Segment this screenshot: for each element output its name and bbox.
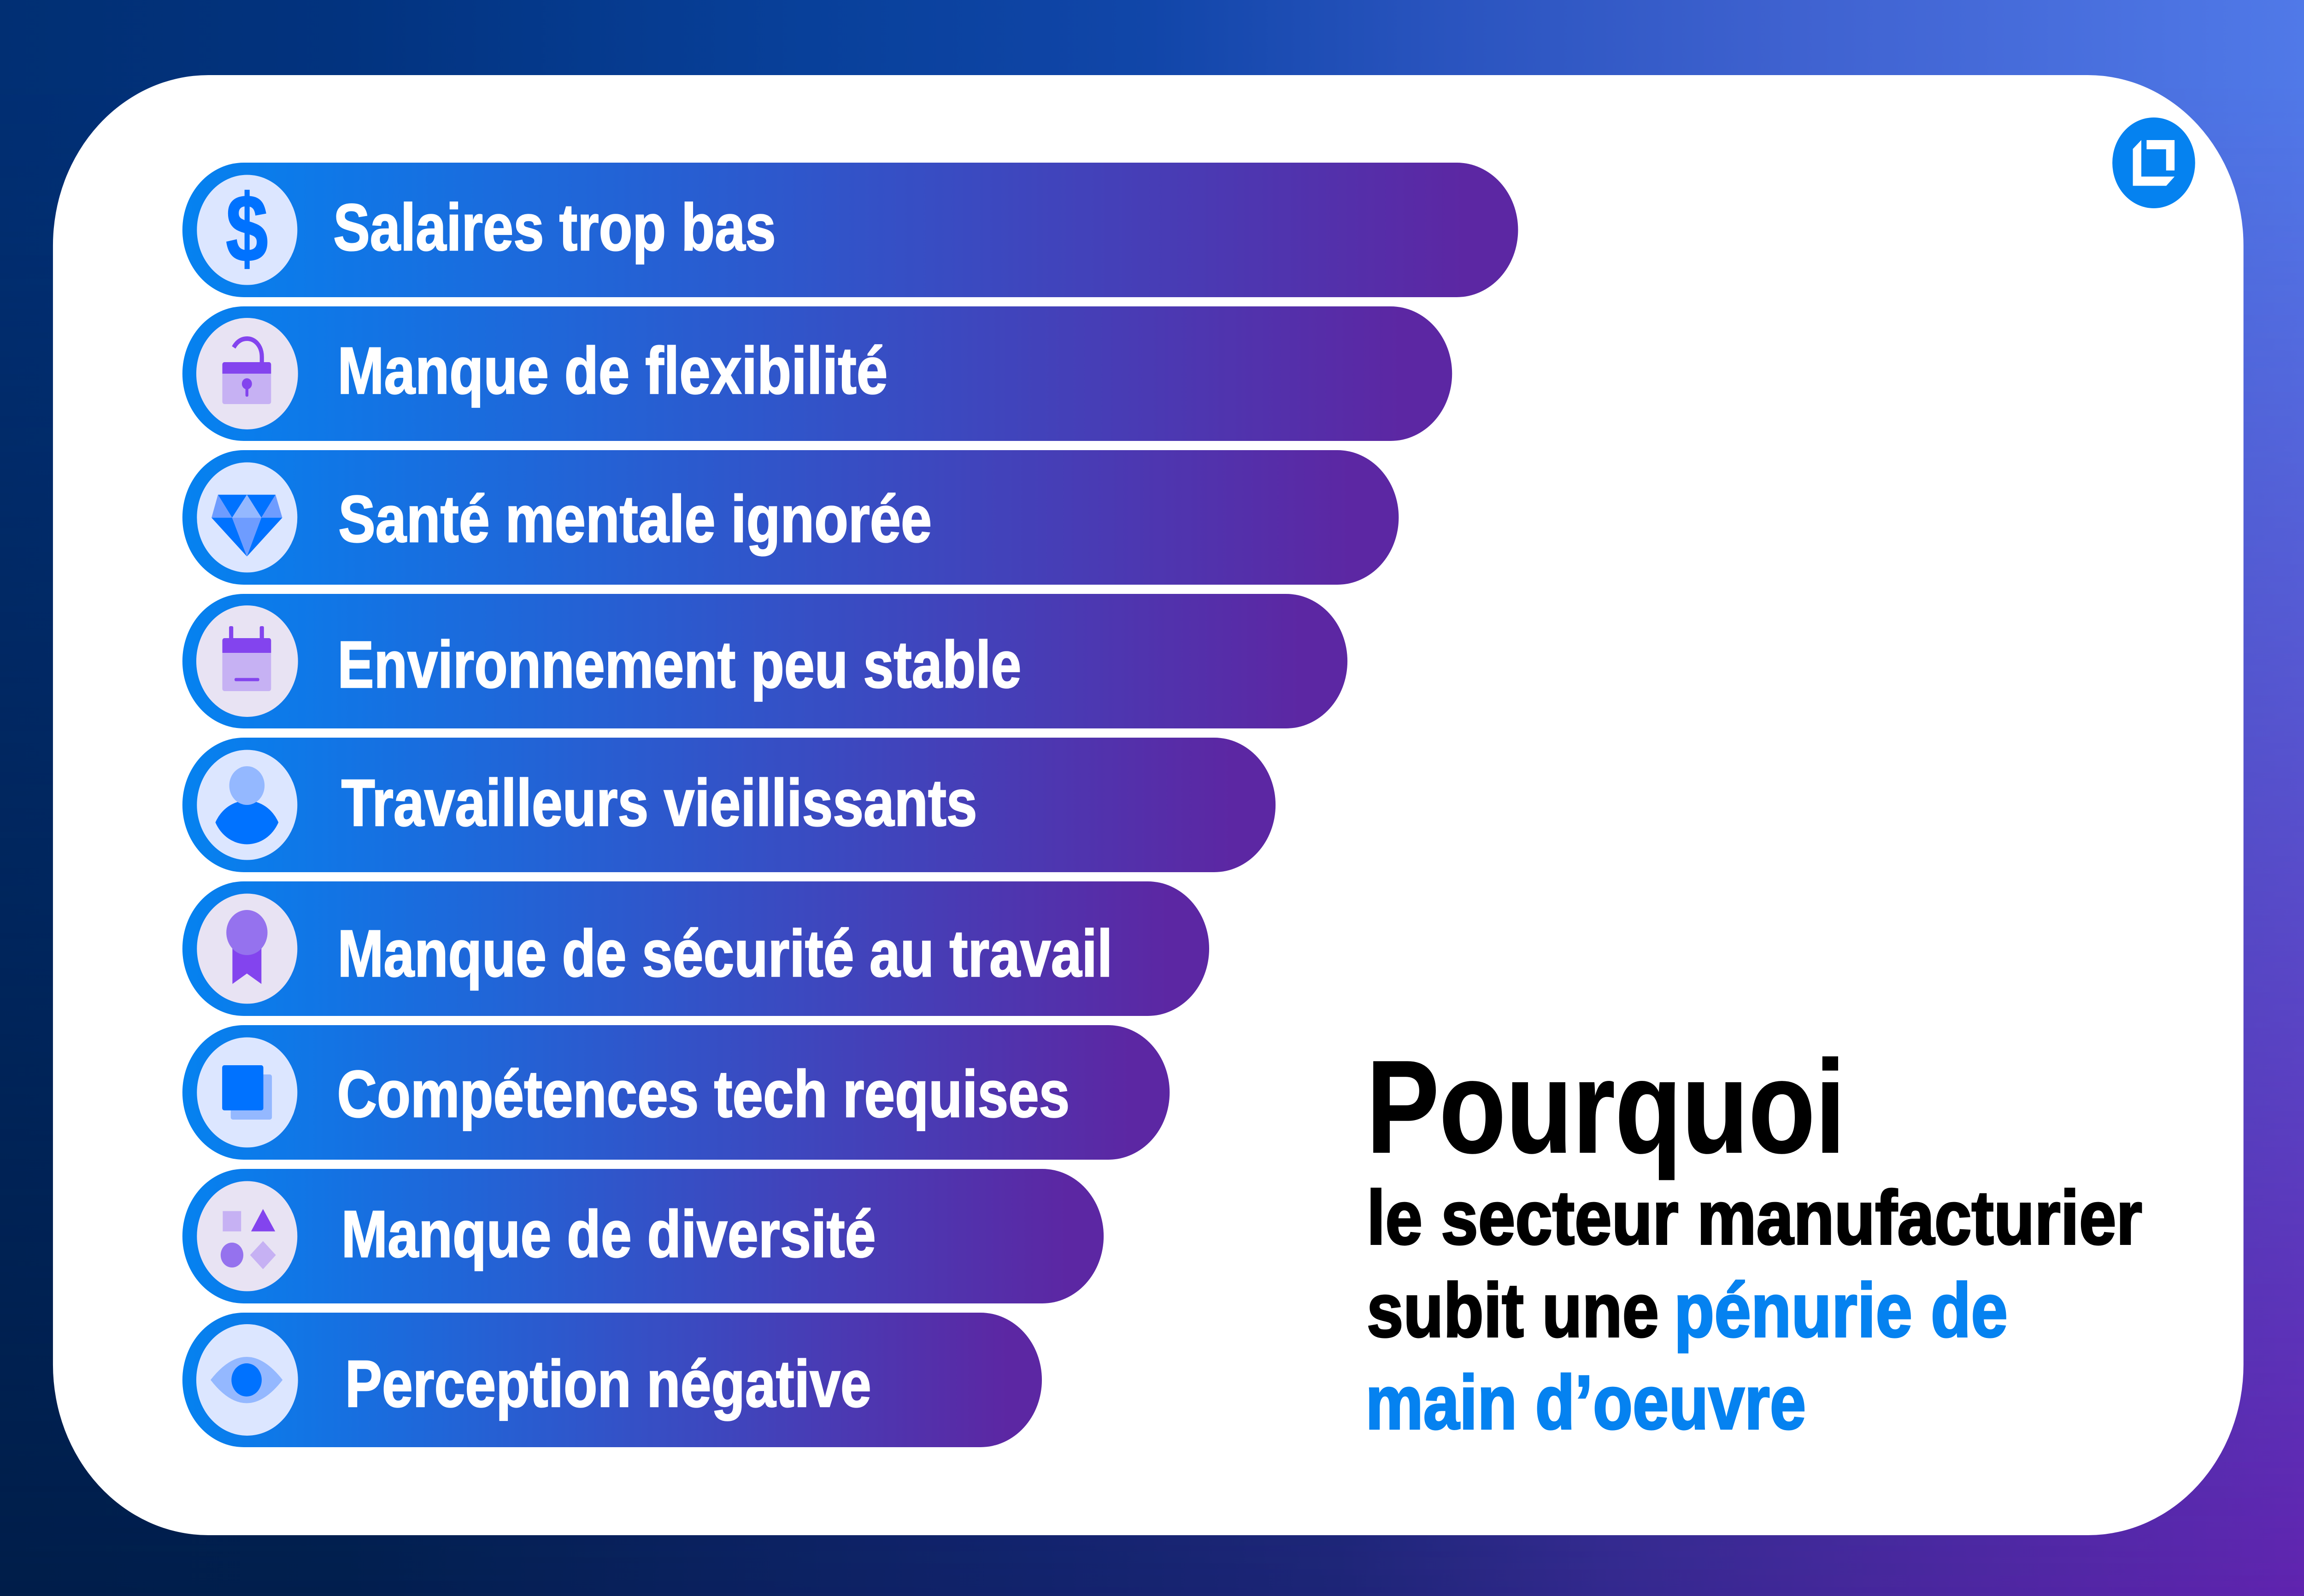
title block [1365, 1033, 2142, 1445]
label: Manque de sécurité au travail: Manque de sécurité au travail [337, 916, 1112, 991]
label: Salaires trop bas: Salaires trop bas [333, 190, 776, 264]
heading: Pourquoi: Pourquoi [1366, 1033, 1846, 1181]
label: Compétences tech requises: Compétences tech requises [337, 1057, 1070, 1131]
label: Perception négative: Perception négative [345, 1347, 871, 1421]
label: Santé mentale ignorée: Santé mentale ignorée [338, 482, 932, 556]
subtitle line 3 blue: main d’oeuvre [1365, 1360, 1806, 1445]
logo [2112, 117, 2195, 208]
bar: Manque de flexibilité [182, 306, 1452, 441]
bar: Travailleurs vieillissants [182, 738, 1275, 872]
bar: Perception négative [182, 1313, 1042, 1447]
subtitle line 2 blue: pénurie de [1674, 1267, 2008, 1353]
icon: dollar: $ [226, 175, 268, 282]
icon: award ribbon [226, 910, 268, 984]
icon: person [215, 766, 278, 844]
icon: shapes [221, 1209, 276, 1269]
icon: open padlock [222, 339, 271, 404]
label: Manque de diversité: Manque de diversité [341, 1197, 876, 1271]
label: Travailleurs vieillissants: Travailleurs vieillissants [341, 766, 977, 840]
icon: eye [211, 1357, 282, 1403]
subtitle line 1: le secteur manufacturier [1367, 1175, 2142, 1261]
subtitle line 2 black: subit une [1367, 1267, 1659, 1353]
bar: Environnement peu stable [182, 594, 1347, 728]
label: Manque de flexibilité: Manque de flexibilité [337, 334, 888, 408]
bar: Compétences tech requises [182, 1025, 1170, 1160]
bar: Salaires trop bas [182, 163, 1518, 297]
bar: Manque de sécurité au travail [182, 881, 1209, 1016]
list of reasons [182, 163, 1518, 1447]
bar: Manque de diversité [182, 1169, 1104, 1303]
icon: layers [222, 1065, 272, 1120]
icon: calendar [222, 626, 271, 691]
icon: diamond [212, 495, 282, 557]
label: Environnement peu stable: Environnement peu stable [337, 628, 1021, 702]
bar: Santé mentale ignorée [182, 450, 1399, 585]
